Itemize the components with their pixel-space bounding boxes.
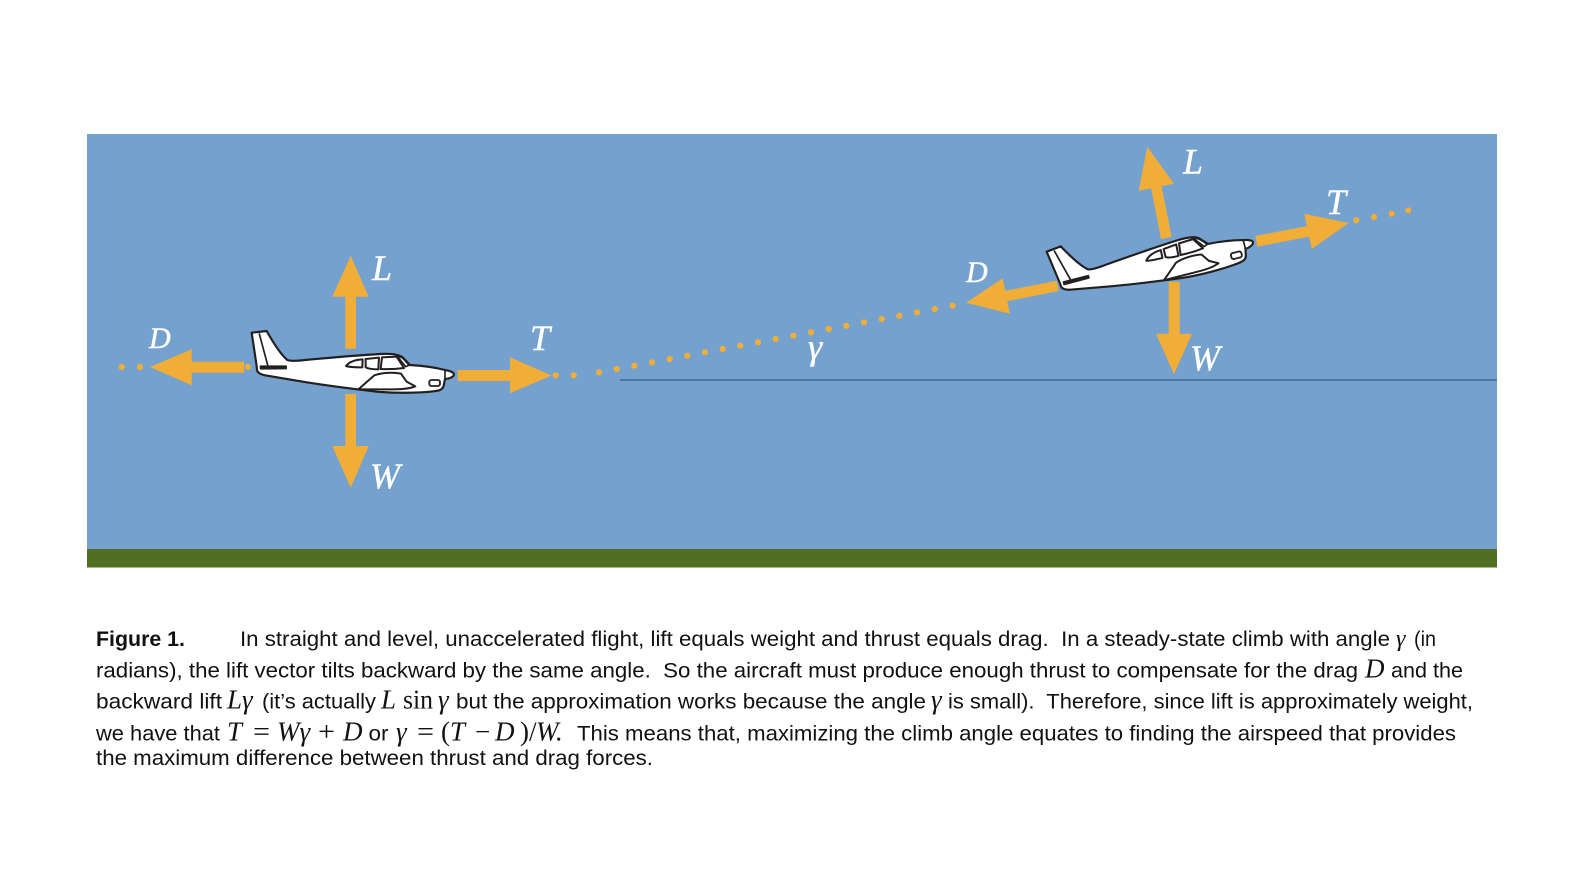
caption: sin [403, 684, 433, 714]
caption: the maximum difference between thrust and drag forces. [96, 746, 653, 770]
caption: T [450, 716, 467, 746]
label: W: W [370, 456, 403, 496]
arrow: thrust, level [458, 357, 552, 393]
caption: This means that, maximizing the climb angle equates to finding the airspeed that provides [577, 722, 1456, 746]
caption: but the approximation works because the angle [456, 690, 926, 714]
caption: D [342, 716, 363, 746]
arrow: lift, level [332, 256, 369, 349]
caption: Figure 1. [96, 627, 185, 651]
caption: D [494, 716, 515, 746]
label: climb angle gamma: γ [808, 327, 823, 367]
caption: γ [1396, 626, 1406, 652]
caption: L [380, 684, 396, 714]
background: sky [87, 134, 1497, 549]
caption: (it’s actually [262, 690, 376, 714]
caption: γ [438, 684, 450, 714]
caption: γ [931, 684, 943, 714]
caption: D [1364, 654, 1385, 684]
icon: airplane, level [252, 331, 454, 393]
caption: Wγ [277, 716, 311, 746]
arrow: weight, climb [1156, 282, 1192, 374]
caption: = [253, 716, 270, 746]
label: L: L [371, 248, 392, 288]
label: T: T [530, 318, 553, 358]
caption [95, 626, 1473, 770]
arrow: lift, climb [1139, 147, 1174, 239]
label: D: D [148, 322, 171, 355]
caption: is small). Therefore, since lift is approximately weight, [948, 690, 1473, 714]
caption: we have that [95, 722, 220, 746]
caption: (in [1414, 627, 1436, 651]
caption: γ [396, 716, 408, 746]
label: L: L [1182, 142, 1203, 182]
caption: − [475, 716, 490, 746]
label: T: T [1326, 182, 1349, 222]
caption: T [227, 716, 244, 746]
caption: and the [1391, 658, 1463, 682]
caption: In straight and level, unaccelerated flight, lift equals weight and thrust equals drag. In a steady-state climb with angle [240, 627, 1390, 651]
caption: + [318, 716, 335, 746]
climbing flight force diagram [965, 142, 1349, 378]
arrow: thrust, climb [1255, 214, 1349, 249]
caption: W. [536, 716, 563, 746]
level flight force diagram [148, 248, 553, 496]
caption: = [417, 716, 434, 746]
arrow: drag, level [150, 349, 244, 385]
background: ground [87, 549, 1497, 568]
caption: Lγ [226, 684, 254, 714]
caption: radians), the lift vector tilts backward by the same angle. So the aircraft must produce enough thrust to compensate for the drag [96, 658, 1358, 682]
icon: airplane, climb [1046, 200, 1258, 310]
label: D: D [965, 256, 988, 289]
caption: backward lift [96, 690, 222, 714]
horizon reference line [620, 379, 1497, 381]
caption: or [368, 722, 388, 746]
label: W: W [1190, 338, 1223, 378]
dotted flight path [119, 207, 1411, 378]
caption: )/ [520, 716, 537, 746]
caption: ( [441, 716, 450, 746]
arrow: drag, climb [966, 278, 1059, 314]
arrow: weight, level [332, 394, 369, 488]
